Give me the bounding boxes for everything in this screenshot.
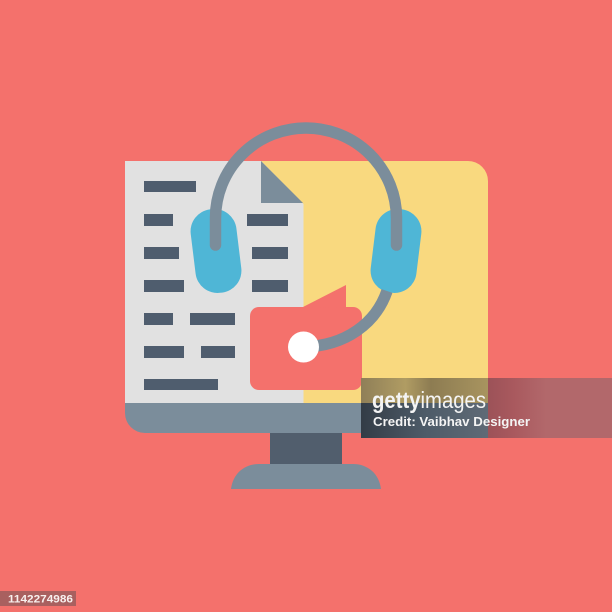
image id tag	[0, 591, 76, 606]
speech bubble	[250, 285, 362, 390]
watermark credit: Credit: Vaibhav Designer	[373, 415, 530, 429]
document	[125, 161, 304, 403]
microphone boom	[303, 291, 387, 347]
illustration: computer monitor	[125, 161, 488, 489]
document text lines	[144, 181, 288, 390]
watermark logo: gettyimages	[372, 387, 486, 413]
icon: right ear cup	[368, 207, 424, 295]
icon: microphone	[288, 332, 319, 362]
watermark band	[361, 378, 612, 438]
monitor stand foot	[231, 464, 381, 489]
document folded corner	[261, 161, 303, 203]
monitor screen	[125, 161, 488, 403]
watermark background	[361, 378, 612, 438]
monitor bezel	[125, 403, 488, 433]
monitor stand neck	[270, 432, 342, 465]
icon: left ear cup	[188, 207, 244, 295]
headset	[188, 128, 424, 362]
document page	[125, 161, 304, 403]
headband	[216, 128, 396, 245]
image id tag: 1142274986	[8, 594, 73, 606]
